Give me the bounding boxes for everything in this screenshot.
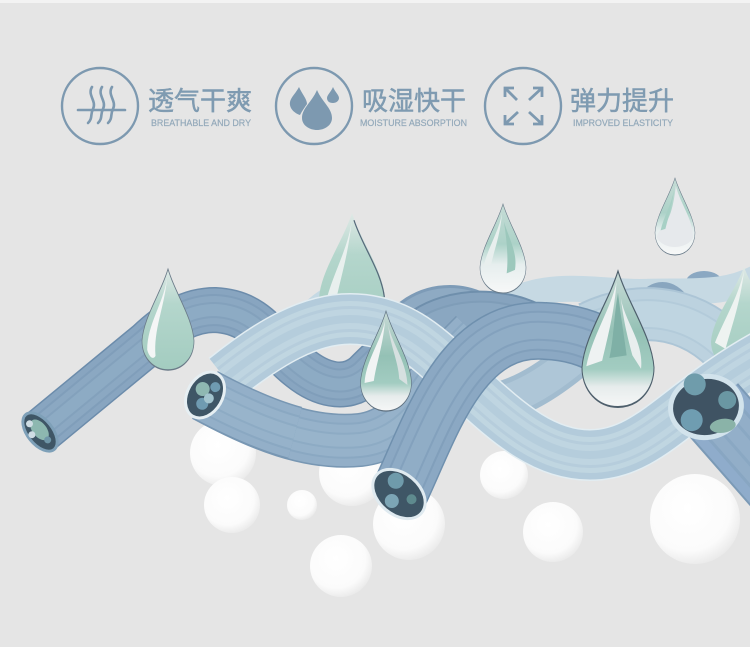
caption: breathable and dry: BREATHABLE AND DRY [151,118,251,128]
icon: heat waves [62,68,138,144]
fiber A cross-section [14,405,66,459]
fiber C: light blue strand [225,319,750,455]
fiber B front segment [205,395,295,433]
fiber F cross-section [663,367,748,445]
water droplet large center [582,271,654,407]
fiber B: mid blue strand [205,335,475,441]
water droplet behind fibers [319,213,385,333]
heading: 吸湿快干: 吸湿快干 [362,86,466,116]
water droplet top center [480,204,526,293]
fiber D: front blue strand [399,331,610,494]
feature: improved elasticity [485,68,674,144]
fiber G: inner blue strand [475,350,585,405]
feature: moisture absorption [276,68,467,144]
caption: moisture absorption: MOISTURE ABSORPTION [360,118,467,128]
top white strip [0,0,750,3]
feature: breathable and dry [62,68,252,144]
heading: 透气干爽: 透气干爽 [148,86,252,116]
fiber A: dark blue strand [40,310,425,432]
water droplet right edge [711,267,750,372]
dark fiber humps [385,303,545,345]
icon: water drops [276,68,352,144]
fiber F: lower right strand [711,407,750,520]
caption: improved elasticity: IMPROVED ELASTICITY [573,118,673,128]
heading: 弹力提升: 弹力提升 [570,86,674,116]
water droplet on strand C [360,311,412,411]
fiber B cross-section [176,363,234,427]
back fibers [285,271,750,370]
water droplet on strand A [142,269,194,370]
white foam spheres [190,420,740,597]
fiber D cross-section [361,457,437,531]
water droplet top right [655,178,695,255]
icon: expanding arrows [485,68,561,144]
